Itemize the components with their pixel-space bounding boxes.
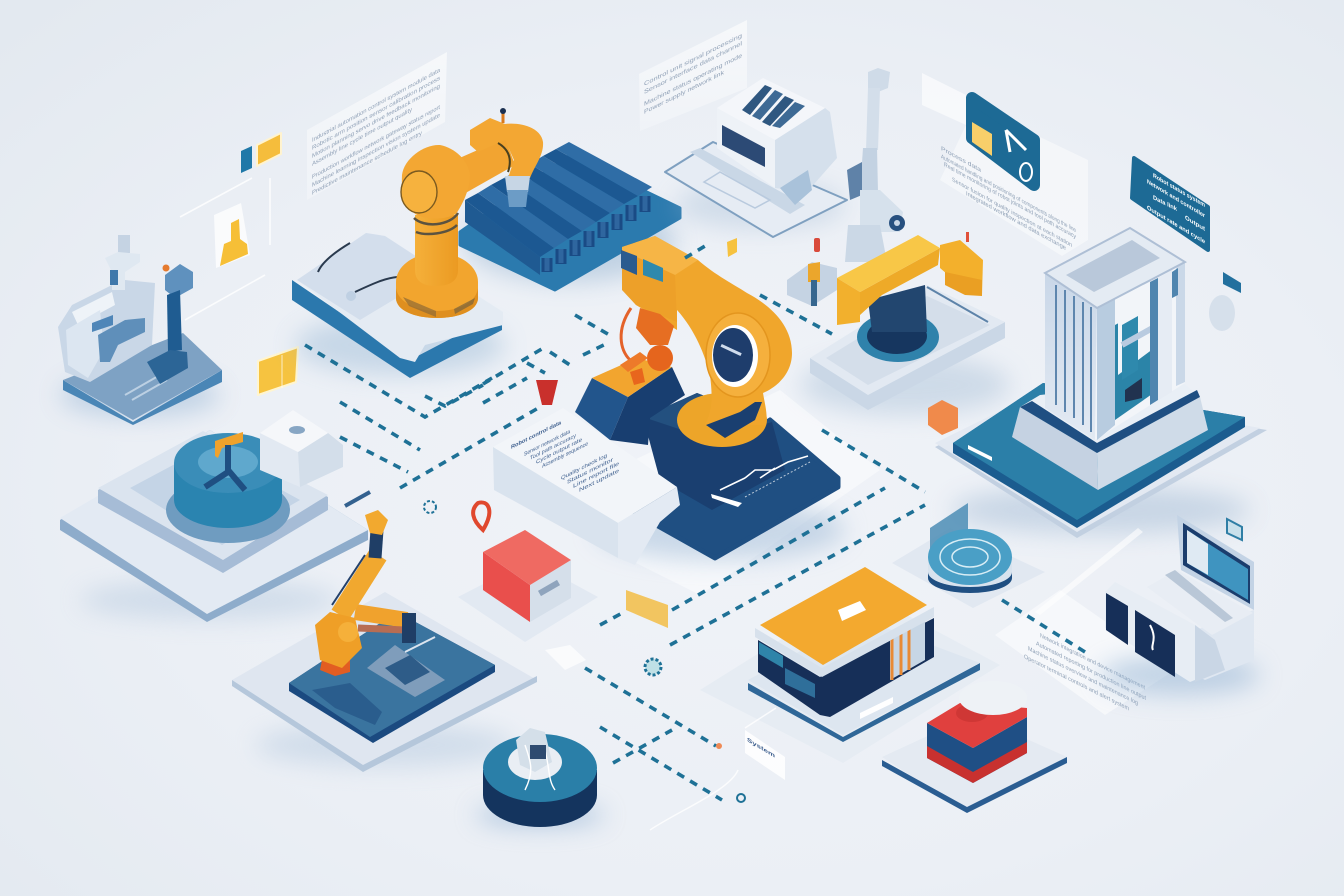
panel: blue data card — [1132, 158, 1208, 250]
icon: red tag — [536, 380, 558, 405]
panel: floating text and icon card top right: Process data — [941, 145, 981, 174]
panel: blue data card: Output rate and cycle — [1147, 204, 1205, 246]
rotary table station left — [60, 410, 370, 622]
gantry beam — [860, 248, 940, 315]
panel: blue data card: Output — [1185, 214, 1206, 233]
stand — [1195, 610, 1254, 680]
paper sheet: Robot control data — [511, 420, 562, 451]
screen — [1177, 515, 1254, 610]
control screens — [621, 250, 637, 275]
icon: orange dots — [716, 743, 722, 749]
plinth — [1012, 407, 1098, 490]
icon: blue chip — [1223, 272, 1241, 293]
panel: floating text top centre — [639, 20, 747, 131]
tool machine — [367, 645, 445, 697]
icon: orange cube — [928, 400, 958, 435]
dashed connector to laptop — [1002, 600, 1085, 652]
machine: white and blue top left — [58, 235, 222, 425]
orange arm — [315, 510, 416, 676]
fin end caps — [547, 196, 645, 272]
teal ring — [857, 312, 939, 362]
blue drum — [174, 463, 282, 528]
small floating chip and pie right of tower — [1209, 272, 1241, 331]
body top — [717, 78, 825, 140]
red and blue cylinder station — [882, 681, 1067, 813]
dark drum bottom — [475, 728, 605, 827]
plinth — [810, 322, 1005, 410]
cabinet — [1105, 582, 1195, 682]
fins — [465, 193, 554, 257]
panel: floating text top left: Predictive maintenance schedule log entry — [312, 129, 423, 197]
icon: teal node — [424, 501, 436, 513]
white box — [260, 433, 300, 487]
icon: tool — [1006, 130, 1026, 152]
left block — [575, 378, 628, 440]
pillar — [415, 215, 458, 286]
paper sheet: Next update — [579, 468, 620, 494]
panel: floating text top centre: Power supply network link — [644, 69, 725, 116]
orange nozzle — [636, 308, 674, 345]
panel: floating text top centre: Control unit signal processing — [644, 32, 743, 88]
antenna — [502, 113, 504, 123]
icon: blue tag — [241, 146, 252, 173]
body — [58, 280, 155, 382]
arm foot cover — [706, 402, 762, 438]
body left face — [717, 108, 775, 188]
blue column — [165, 264, 193, 298]
tower top — [1045, 228, 1185, 308]
orange robot arm one — [396, 108, 543, 318]
base plate — [60, 430, 368, 622]
icon: yellow tag — [257, 133, 281, 166]
red box station — [458, 530, 598, 642]
lower disc — [166, 477, 290, 543]
slots — [742, 85, 772, 115]
panel: floating text and icon card top right: Integrated workflow and data exchange — [966, 190, 1066, 252]
panel: floating text top left: Industrial automation control system module data — [312, 67, 440, 144]
paper sheet: Tool path accuracy — [530, 433, 576, 462]
paper sheet: Quality check log — [561, 453, 607, 482]
text panel lower right — [995, 528, 1175, 715]
panel: floating text top left: Assembly line cycle time output quality — [312, 106, 413, 168]
white bar — [860, 697, 893, 719]
arm station bottom left — [232, 510, 537, 772]
paper sheet: Line report file — [573, 461, 620, 490]
elbow — [470, 118, 543, 178]
yellow arm foot — [677, 393, 767, 447]
panel: blue data card: Network and controller — [1147, 178, 1205, 220]
metal frame — [98, 433, 328, 573]
blue plate — [953, 383, 1245, 528]
panel: floating text top left: Motion planning servo drive feedback monitoring — [312, 83, 440, 160]
icon: pale pie — [1209, 295, 1235, 331]
battery bank — [460, 142, 680, 290]
white robot arm — [787, 68, 905, 306]
pale outer plate — [935, 395, 1267, 538]
white rim — [755, 607, 934, 677]
text panel lower right: Automated reporting for production line output — [1036, 640, 1146, 702]
spring mechanism — [312, 683, 382, 725]
icon: red ring — [473, 502, 489, 530]
small unit — [787, 262, 837, 306]
paper sheet: Cycle output rate — [536, 437, 583, 466]
platform top — [297, 233, 503, 362]
printer machine top centre — [665, 78, 847, 237]
gantry end block — [940, 240, 983, 295]
icon: yellow figure card — [214, 203, 250, 268]
yellow top — [760, 567, 927, 665]
dark turret — [867, 318, 927, 354]
base — [63, 370, 222, 425]
pedestal — [643, 393, 785, 510]
navy base plate — [635, 420, 838, 558]
icon: white tag — [545, 645, 586, 670]
panel: floating text top left — [307, 52, 447, 200]
platform edge — [292, 280, 502, 378]
icon: yellow badge — [727, 238, 737, 257]
laptop and cabinet — [1100, 515, 1260, 695]
dashed connector lines — [305, 243, 925, 800]
base plate — [460, 155, 680, 290]
circuit diagram on base — [711, 456, 810, 507]
yellow arm body — [622, 236, 792, 425]
icon: yellow folder — [972, 122, 992, 156]
icon: teal gear — [645, 659, 661, 675]
tower right open frame — [1095, 262, 1185, 440]
icon: white arrow lines — [180, 178, 270, 320]
panel: floating text top left: Machine learning inspection vision system update — [312, 112, 440, 189]
central robot station — [493, 236, 880, 595]
disc station — [892, 503, 1045, 608]
robot arm station upper left — [292, 233, 505, 378]
paper sheet — [493, 408, 680, 565]
paper sheet: Assembly sequence — [542, 441, 589, 470]
panel: floating text and icon card top right: Automated handling and positioning of components along the line — [941, 153, 1076, 234]
yellow top block station — [700, 567, 1000, 763]
icon card — [972, 98, 1034, 185]
right face — [820, 618, 934, 717]
panel: blue data card: Data link — [1153, 194, 1177, 213]
right side unit — [775, 108, 837, 192]
panel: floating text top centre: Machine status operating mode — [644, 52, 743, 108]
text panel lower right: Network integration and device management — [1040, 632, 1145, 691]
panel: floating text top left: Production workflow network gateway status report — [312, 104, 440, 181]
small floating icons upper left — [180, 133, 281, 320]
panel: floating text and icon card top right — [922, 73, 1088, 256]
blue plate — [289, 612, 495, 743]
paper sheet: Sensor network data — [524, 429, 571, 458]
left face — [758, 640, 820, 715]
tower left face — [1045, 273, 1097, 440]
icon: node tail — [737, 794, 745, 802]
arm ring — [706, 313, 770, 397]
laptop deck — [1147, 570, 1253, 635]
label card lower centre: System — [747, 736, 776, 760]
block side — [465, 200, 540, 275]
small connector markers — [424, 238, 958, 802]
upper arm — [455, 138, 515, 195]
panel: blue data card: Robot status system — [1153, 172, 1205, 209]
text panel lower right: Machine status overview and maintenance log — [1028, 645, 1138, 707]
yellow icon card left — [258, 347, 298, 395]
block top — [927, 703, 1027, 748]
panel: floating text and icon card top right: Real time monitoring of robot joints and tool path accuracy — [944, 161, 1077, 241]
yellow gantry robot station — [800, 232, 1010, 415]
paper sheet: Status monitor — [567, 457, 613, 486]
text panel lower right: Operator terminal controls and alert system — [1024, 653, 1129, 712]
tool head — [505, 176, 530, 192]
block yellow top — [592, 358, 672, 397]
panel: floating text top left: Robotic arm position sensor calibration process — [312, 75, 440, 152]
label card lower centre — [650, 708, 785, 830]
icon: yellow sticker — [626, 590, 668, 628]
server tower station — [935, 228, 1267, 538]
shoulder — [402, 145, 470, 219]
screen icon — [1227, 519, 1242, 540]
icon: gear — [1020, 163, 1032, 181]
small orange arm — [205, 432, 245, 490]
base — [396, 253, 478, 318]
block body — [927, 717, 1027, 783]
panel: floating text and icon card top right: Sensor fusion for quality inspection at each station — [952, 176, 1072, 249]
panel: floating text top centre: Sensor interface data channel — [644, 40, 742, 96]
